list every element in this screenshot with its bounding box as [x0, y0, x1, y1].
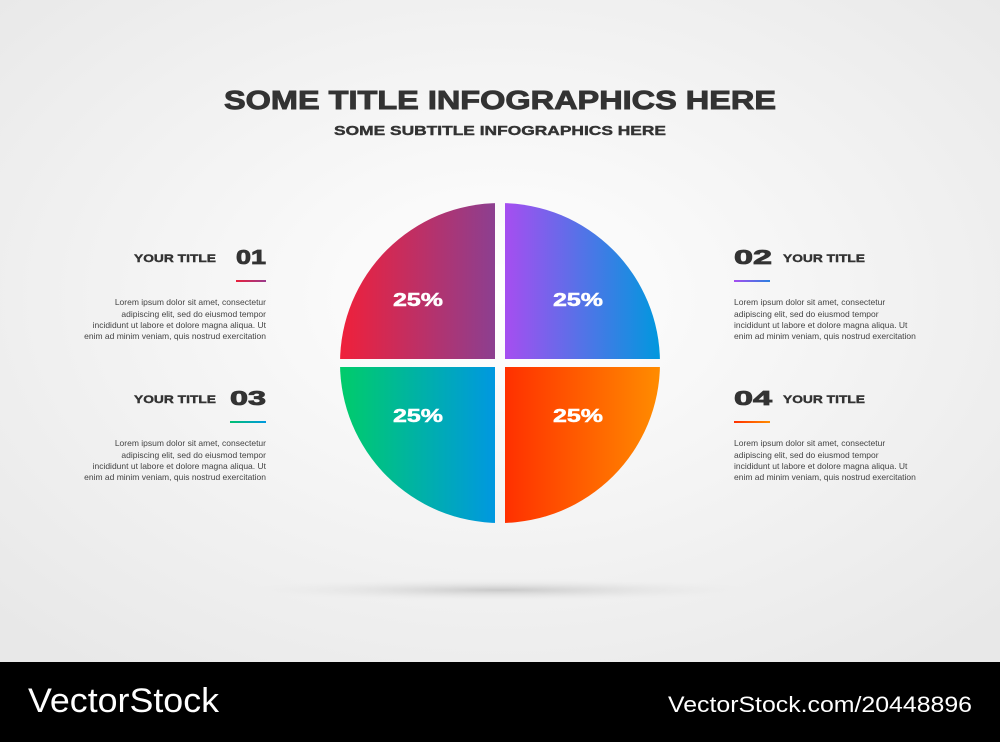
title: SOME TITLE INFOGRAPHICS HERE	[224, 85, 776, 115]
panel 03: Lorem ipsum dolor sit amet, consectetur	[115, 438, 266, 448]
panel 03: adipiscing elit, sed do eiusmod tempor	[121, 450, 266, 460]
panel 02: 02	[734, 247, 772, 269]
panel 04: enim ad minim veniam, quis nostrud exercitation	[734, 472, 916, 482]
panel 03: enim ad minim veniam, quis nostrud exercitation	[84, 472, 266, 482]
subtitle: SOME SUBTITLE INFOGRAPHICS HERE	[334, 123, 666, 138]
panel 01: enim ad minim veniam, quis nostrud exercitation	[84, 331, 266, 341]
panel 02	[734, 247, 916, 341]
footer bar: VectorStock	[28, 682, 220, 720]
pie chart: 25%	[393, 290, 443, 310]
panel 04: 04	[734, 388, 773, 410]
panel 03	[84, 388, 267, 482]
panel 01	[84, 247, 267, 341]
panel 03: incididunt ut labore et dolore magna aliqua. Ut	[93, 461, 267, 471]
panel 02: adipiscing elit, sed do eiusmod tempor	[734, 309, 879, 319]
panel 04: incididunt ut labore et dolore magna aliqua. Ut	[734, 461, 908, 471]
panel 01: YOUR TITLE	[134, 253, 216, 265]
panel 01: incididunt ut labore et dolore magna aliqua. Ut	[93, 320, 267, 330]
pie chart	[340, 203, 660, 523]
panel 01: adipiscing elit, sed do eiusmod tempor	[121, 309, 266, 319]
panel 01: Lorem ipsum dolor sit amet, consectetur	[115, 297, 266, 307]
panel 03: 03	[230, 388, 266, 410]
panel 02: incididunt ut labore et dolore magna aliqua. Ut	[734, 320, 908, 330]
pie chart: 25%	[553, 290, 603, 310]
panel 04: YOUR TITLE	[783, 394, 865, 406]
panel 02: Lorem ipsum dolor sit amet, consectetur	[734, 297, 885, 307]
panel 03: YOUR TITLE	[134, 394, 216, 406]
panel 04: adipiscing elit, sed do eiusmod tempor	[734, 450, 879, 460]
pie chart: 25%	[553, 406, 603, 426]
shadow	[210, 578, 790, 602]
panel 04	[734, 388, 916, 482]
footer bar: VectorStock.com/20448896	[668, 692, 972, 717]
panel 02: YOUR TITLE	[783, 253, 865, 265]
pie chart: 25%	[393, 406, 443, 426]
panel 04: Lorem ipsum dolor sit amet, consectetur	[734, 438, 885, 448]
panel 02: enim ad minim veniam, quis nostrud exercitation	[734, 331, 916, 341]
footer bar	[0, 662, 1000, 742]
panel 01: 01	[236, 247, 266, 269]
